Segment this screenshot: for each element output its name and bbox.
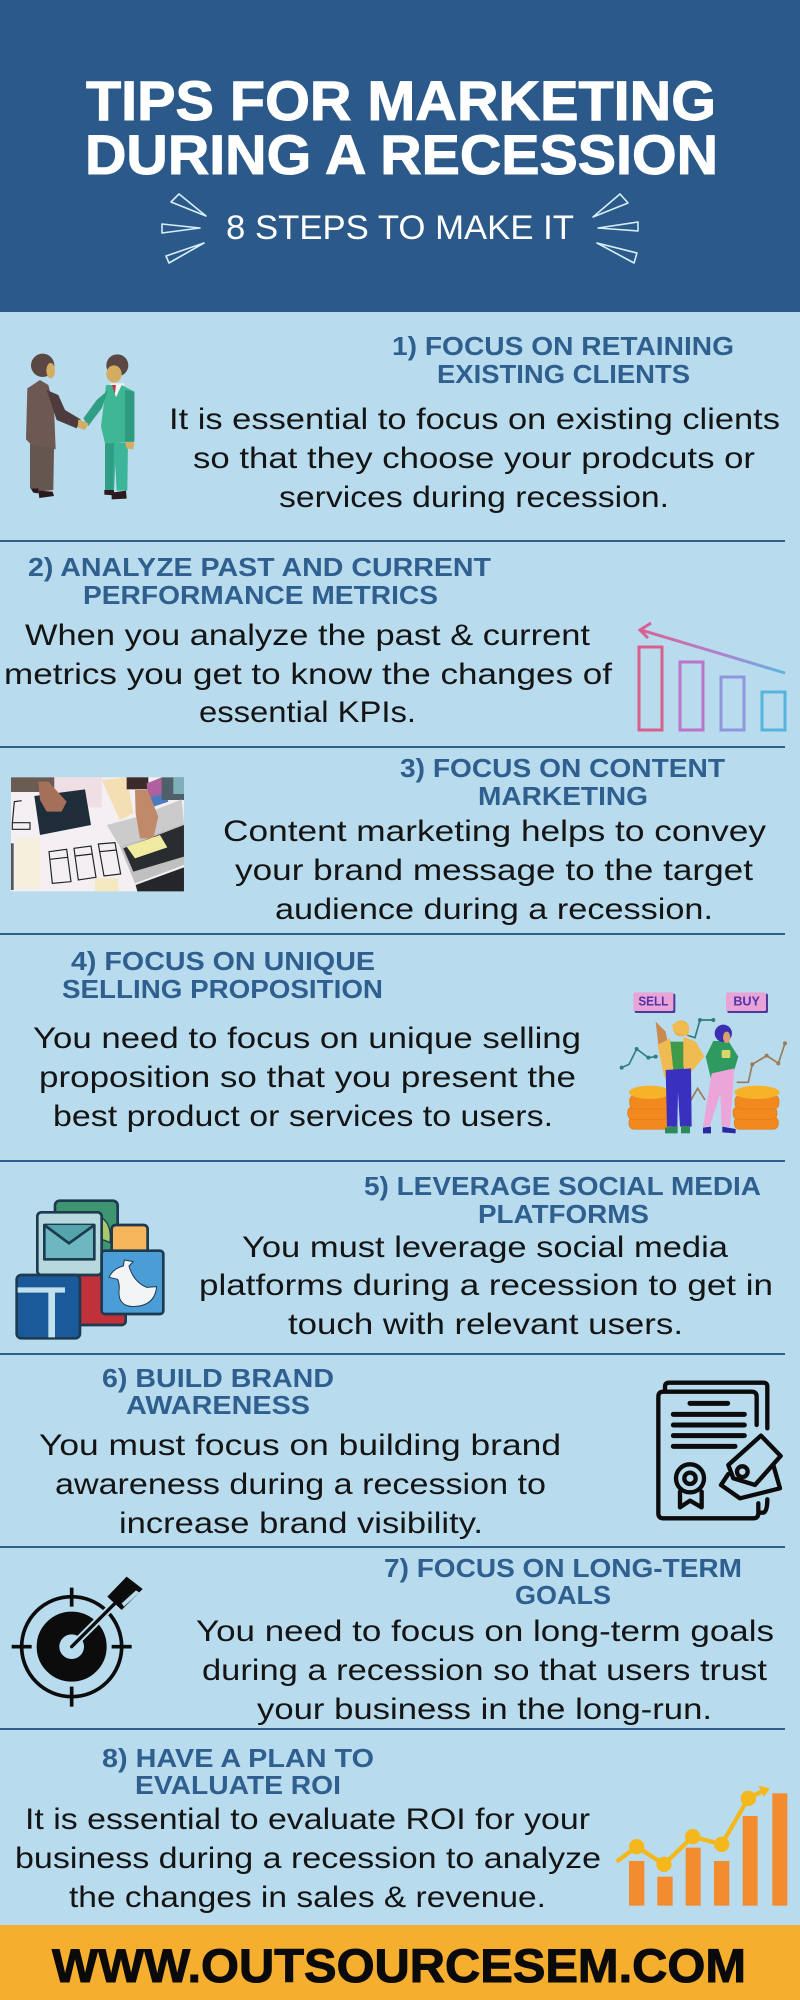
heading: step 3: MARKETING [478,781,648,811]
heading: step 6: AWARENESS [126,1390,310,1420]
text: step 6 body: awareness during a recession to [55,1468,546,1501]
heading: step 7: 7) FOCUS ON LONG-TERM [384,1553,742,1583]
panel: header [0,0,800,312]
text: step 3 body: Content marketing helps to convey [223,815,766,848]
text: step 1 body: services during recession. [279,481,669,514]
heading: step 7 [384,1553,742,1610]
text: step 5 body [199,1231,773,1341]
panel: step 8 [15,1743,787,1914]
icon: right burst rays [593,194,638,263]
icon: handshake [26,354,134,499]
icon: left burst rays [162,194,206,263]
text: step 6 body: You must focus on building brand [39,1429,561,1462]
panel: step 3 [11,753,766,926]
heading: step 5 [364,1171,761,1229]
text: step 8 body [15,1803,601,1914]
footer website url: WWW.OUTSOURCESEM.COM [52,1939,746,1992]
text: step 3 body: audience during a recession. [275,893,713,926]
icon: BUY tag: BUY [733,995,761,1009]
text: step 3 body: your brand message to the target [235,854,754,887]
image: designer desk with laptop and wireframes [11,777,184,891]
text: step 6 body: increase brand visibility. [119,1507,483,1540]
heading: step 8: EVALUATE ROI [135,1770,341,1800]
heading: step 3 [400,753,725,811]
heading: step 5: PLATFORMS [478,1199,649,1229]
title: TIPS FOR MARKETING [86,69,716,132]
icon: target with arrow [12,1577,143,1707]
text: step 4 body: best product or services to users. [53,1100,553,1133]
heading: step 2: PERFORMANCE METRICS [83,580,438,610]
title [85,69,718,186]
chart: declining bars with arrow [639,623,785,730]
icon: certificate and price tag [658,1383,781,1518]
text: step 2 body: essential KPIs. [199,696,416,729]
heading: step 2: 2) ANALYZE PAST AND CURRENT [28,552,491,582]
text: step 1 body: so that they choose your prodcuts or [193,442,755,475]
icon: BUY tag [726,992,768,1013]
text: step 5 body: platforms during a recession to get in [199,1269,773,1302]
text: step 8 body: It is essential to evaluate ROI for your [25,1803,590,1836]
text: step 5 body: You must leverage social media [242,1231,728,1264]
text: step 7 body: You need to focus on long-term goals [196,1615,774,1648]
panel: step 2 [4,552,785,730]
heading: step 8: 8) HAVE A PLAN TO [102,1743,374,1773]
text: step 2 body [4,619,613,729]
heading: step 1: 1) FOCUS ON RETAINING [392,331,734,361]
text: step 6 body [39,1429,561,1540]
text: step 1 body [169,403,780,514]
heading: step 7: GOALS [515,1580,611,1610]
text: step 8 body: business during a recession to analyze [15,1842,601,1875]
text: step 4 body: proposition so that you present the [39,1061,576,1094]
icon: sell and buy traders [620,992,787,1133]
panel: step 5 [17,1171,773,1341]
heading: step 8 [102,1743,374,1800]
icon: social media app tiles [17,1201,163,1338]
heading: step 6: 6) BUILD BRAND [102,1363,334,1393]
text: step 5 body: touch with relevant users. [288,1308,683,1341]
heading: step 5: 5) LEVERAGE SOCIAL MEDIA [364,1171,761,1201]
icon: SELL tag [633,992,675,1013]
panel: step 6 [39,1363,781,1540]
heading: step 3: 3) FOCUS ON CONTENT [400,753,725,783]
subtitle: 8 STEPS TO MAKE IT [226,209,574,247]
heading: step 1: EXISTING CLIENTS [437,359,690,389]
heading: step 2 [28,552,491,610]
text: step 8 body: the changes in sales & revenue. [69,1881,546,1914]
heading: step 4: 4) FOCUS ON UNIQUE [71,946,375,976]
panel: footer banner [0,1925,800,2000]
heading: step 1 [392,331,734,389]
text: step 1 body: It is essential to focus on existing clients [169,403,780,436]
panel: step 4 [33,946,787,1133]
text: step 2 body: metrics you get to know the changes of [4,658,613,691]
panel: step 1 [26,331,780,514]
text: step 3 body [223,815,766,926]
chart: growth bars with trend line [617,1786,787,1906]
text: step 7 body [196,1615,774,1726]
text: step 4 body: You need to focus on unique selling [33,1022,581,1055]
heading: step 4 [62,946,383,1004]
heading: step 4: SELLING PROPOSITION [62,974,383,1004]
title: DURING A RECESSION [85,123,718,186]
icon: SELL tag: SELL [638,995,669,1009]
text: step 2 body: When you analyze the past & current [25,619,591,652]
text: step 7 body: your business in the long-run. [257,1693,712,1726]
text: step 7 body: during a recession so that users trust [202,1654,768,1687]
text: step 4 body [33,1022,581,1133]
heading: step 6 [102,1363,334,1420]
panel: step 7 [12,1553,774,1726]
